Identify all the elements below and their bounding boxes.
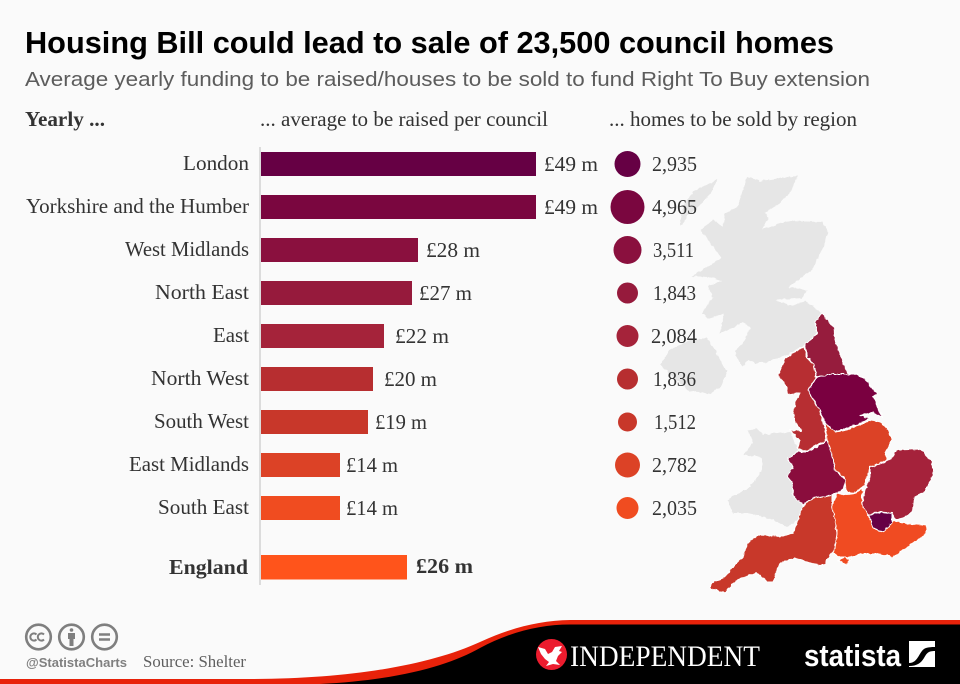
row: North West: £20 m <box>384 367 437 391</box>
map: English regions <box>710 313 933 593</box>
row: North East: North East <box>155 280 249 304</box>
row: North West <box>151 366 696 391</box>
statista charts handle: @StatistaCharts <box>26 655 127 670</box>
region: East <box>862 449 933 520</box>
region: Isle of Wight <box>838 557 851 565</box>
row: South East: £14 m <box>346 496 398 520</box>
row: South West: £19 m <box>375 410 427 434</box>
row: East <box>213 323 697 348</box>
row: London: London <box>183 151 250 175</box>
map of Great Britain with English regions <box>660 176 933 593</box>
column headings: Yearly ... <box>25 107 105 131</box>
row: North East: £27 m <box>419 281 472 305</box>
region: Yorkshire and the Humber <box>808 374 883 432</box>
row: England total: £26 m <box>416 554 474 578</box>
footer band <box>0 620 960 684</box>
row: West Midlands <box>125 236 694 264</box>
region: South East <box>825 488 927 557</box>
column headings: ... homes to be sold by region <box>609 107 857 131</box>
row: South West <box>154 409 696 434</box>
row: East: East <box>213 323 249 347</box>
region: South West <box>710 495 837 593</box>
row: East: 2,084 <box>651 324 697 348</box>
row: London: 2,935 <box>652 152 697 176</box>
title: Housing Bill could lead to sale of 23,500 council homes <box>25 25 834 60</box>
logo: The Independent: INDEPENDENT <box>570 640 760 673</box>
row: South East: South East <box>158 495 249 519</box>
region: West Midlands <box>787 440 846 505</box>
map: Scotland, Wales and Northern Ireland in grey <box>660 176 828 527</box>
region: North East <box>805 313 855 377</box>
subtitle: Average yearly funding to be raised/houses to be sold to fund Right To Buy extension <box>25 68 870 91</box>
region: East Midlands <box>825 420 892 493</box>
row: East: £22 m <box>395 324 449 348</box>
row: North West: North West <box>151 366 249 390</box>
region: London <box>869 512 892 532</box>
row: South West: 1,512 <box>654 410 696 434</box>
row: North East <box>155 280 696 305</box>
row: Yorkshire and the Humber: 4,965 <box>652 195 697 219</box>
row: West Midlands: £28 m <box>426 238 480 262</box>
row: East Midlands: East Midlands <box>129 452 249 476</box>
row: London <box>183 151 697 177</box>
column headings: ... average to be raised per council <box>260 107 548 131</box>
source: Source: Shelter <box>143 652 246 671</box>
row: North West: 1,836 <box>653 367 696 391</box>
icons: creative commons <box>26 625 117 649</box>
bar chart axis <box>259 147 261 585</box>
row: Yorkshire and the Humber: Yorkshire and the Humber <box>26 194 249 218</box>
row: England total <box>169 554 474 580</box>
region: North West <box>778 346 827 452</box>
row: England total: England <box>169 555 248 579</box>
row: West Midlands: West Midlands <box>125 237 249 261</box>
row: East Midlands <box>129 452 697 478</box>
row: North East: 1,843 <box>653 281 696 305</box>
row: South East <box>158 495 697 520</box>
row: London: £49 m <box>544 152 598 176</box>
row: East Midlands: £14 m <box>346 453 398 477</box>
row: East Midlands: 2,782 <box>652 453 697 477</box>
row: South East: 2,035 <box>652 496 697 520</box>
row: West Midlands: 3,511 <box>653 238 694 262</box>
row: South West: South West <box>154 409 249 433</box>
logo: statista: statista <box>804 638 902 673</box>
column headings <box>25 107 857 131</box>
row: Yorkshire and the Humber: £49 m <box>544 195 598 219</box>
row: Yorkshire and the Humber <box>26 190 697 224</box>
